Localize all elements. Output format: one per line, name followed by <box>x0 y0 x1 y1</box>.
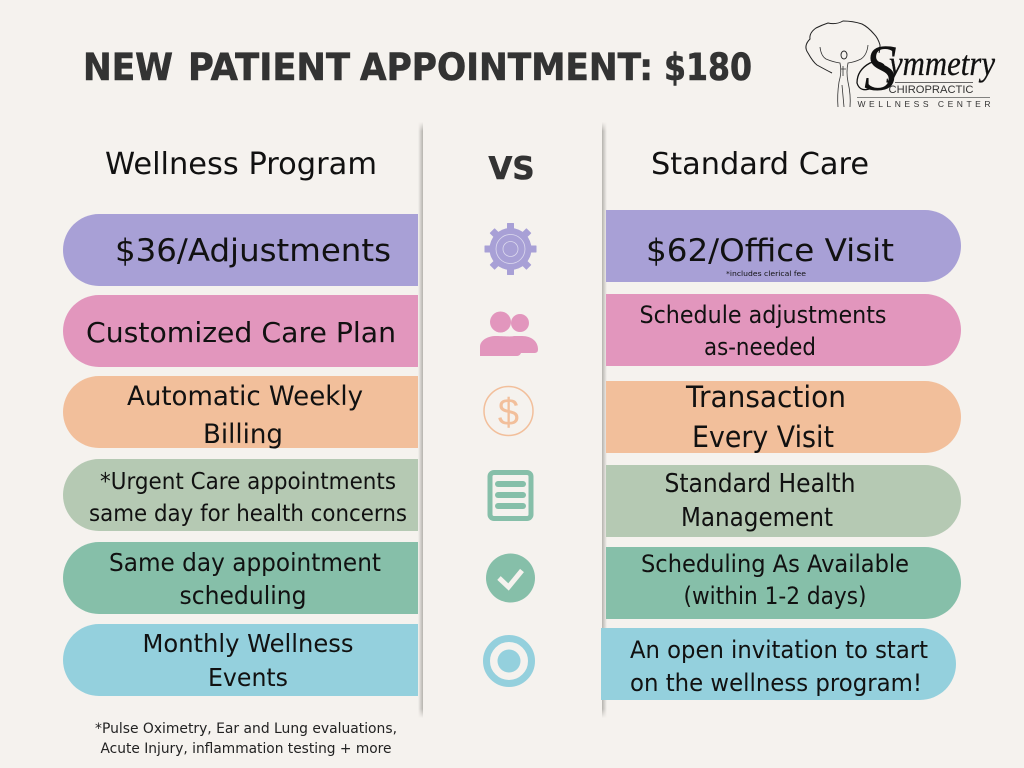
label: Events <box>208 663 288 692</box>
logo: Symmetry Chiropractic <box>806 21 995 109</box>
logo name: S <box>864 32 897 105</box>
logo rule lower <box>857 96 990 99</box>
icon: target <box>486 638 532 684</box>
icon: check mark <box>486 554 535 602</box>
label: $62/Office Visit <box>646 233 894 269</box>
label: (within 1-2 days) <box>684 582 866 610</box>
logo wellness center: WELLNESS CENTER <box>858 99 990 109</box>
column divider right <box>602 123 606 717</box>
label: Schedule adjustments <box>640 301 886 329</box>
title: APPOINTMENT: <box>360 46 653 89</box>
label: same day for health concerns <box>89 501 407 527</box>
footnote: Acute Injury, inflammation testing + more <box>100 741 392 757</box>
panel: left row 6 <box>63 624 418 696</box>
note: *includes clerical fee <box>726 270 806 278</box>
label: $36/Adjustments <box>115 233 391 269</box>
heading: Wellness Program: Wellness Program <box>105 147 377 182</box>
panel: right row 4 <box>606 465 961 537</box>
icon: people <box>480 312 538 356</box>
label: Management <box>681 503 833 533</box>
icon: dollar coin: $ <box>498 392 519 434</box>
icon: list document <box>490 472 531 518</box>
panel: left row 1 <box>63 214 418 286</box>
logo head <box>841 51 847 59</box>
logo swash <box>857 62 884 90</box>
footnote: *Pulse Oximetry, Ear and Lung evaluations, <box>95 721 397 737</box>
title: $180 <box>664 46 752 89</box>
logo rule upper <box>895 81 973 84</box>
logo name: ymmetry <box>886 44 995 83</box>
panel: right row 6 <box>601 628 956 700</box>
panel: left row 5 <box>63 542 418 614</box>
logo tree outline <box>806 21 880 73</box>
label: scheduling <box>180 581 306 610</box>
panel: left row 4 <box>63 459 418 531</box>
icon: gear <box>484 223 536 275</box>
label: on the wellness program! <box>630 669 922 697</box>
icon: dollar coin <box>484 386 533 436</box>
label: Every Visit <box>692 420 834 454</box>
label: Standard Health <box>664 469 856 499</box>
panel: right row 3 <box>606 380 961 454</box>
label: Customized Care Plan <box>86 316 396 349</box>
label: Billing <box>203 419 283 450</box>
logo chiropractic: CHIROPRACTIC <box>888 84 974 96</box>
logo figure <box>820 45 868 107</box>
label: as-needed <box>704 333 816 361</box>
title: NEW <box>83 46 173 89</box>
panel: right row 2 <box>606 294 961 366</box>
panel: right row 1 <box>606 210 961 282</box>
label: Same day appointment <box>109 548 381 577</box>
panel: left row 3 <box>63 376 418 450</box>
label: Automatic Weekly <box>127 381 363 412</box>
label: Monthly Wellness <box>142 629 354 658</box>
label: *Urgent Care appointments <box>100 469 396 495</box>
label: An open invitation to start <box>630 636 928 664</box>
title: PATIENT <box>188 46 351 89</box>
heading: vs: VS <box>488 151 534 187</box>
heading: Standard Care: Standard Care <box>651 147 869 182</box>
panel: right row 5 <box>606 547 961 619</box>
label: Scheduling As Available <box>641 550 909 578</box>
column divider left <box>418 123 423 717</box>
label: Transaction <box>685 380 846 414</box>
panel: left row 2 <box>63 295 418 367</box>
